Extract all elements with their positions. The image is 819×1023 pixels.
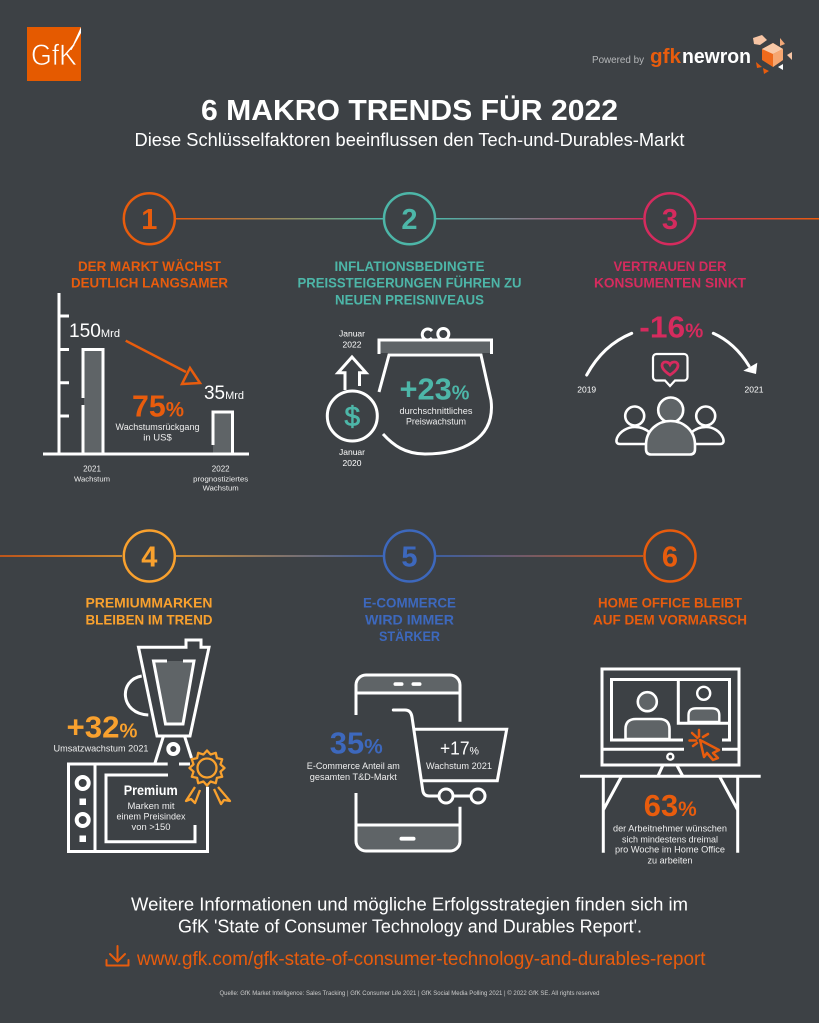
logo: GfK: GfK [31, 39, 77, 72]
number badge 3: 3 [662, 204, 678, 236]
bar chart [43, 293, 249, 454]
number badge 1 [124, 193, 175, 244]
stat +32%: +32% [66, 709, 138, 744]
number badge 2: 2 [401, 204, 418, 236]
icon: blender [125, 640, 209, 763]
stat 75%: 75% [132, 389, 184, 424]
closing text: GfK 'State of Consumer Technology and Durables Report'. [178, 916, 642, 936]
icon: cursor click [690, 730, 719, 760]
icon: desk [580, 765, 761, 853]
stat caption: Preiswachstum [406, 416, 466, 427]
label Januar 2022 [339, 329, 365, 350]
label Januar 2020: Januar [339, 447, 365, 457]
stat caption: Wachstumsrückgang [116, 422, 200, 433]
arrow: decline [126, 341, 200, 384]
heading 6: AUF DEM VORMARSCH [593, 611, 747, 627]
label Januar 2022: Januar [339, 329, 365, 339]
stat caption: Wachstum 2021 [426, 761, 492, 772]
heading 6: HOME OFFICE BLEIBT [598, 595, 742, 611]
stat -16%: -16% [639, 309, 704, 344]
number badge 4: 4 [141, 541, 157, 573]
heading 3: KONSUMENTEN SINKT [594, 275, 746, 291]
stat caption: durchschnittliches [400, 406, 473, 417]
icon: people [616, 398, 724, 454]
label Januar 2020 [339, 447, 365, 468]
label Januar 2020: 2020 [343, 458, 362, 468]
title: 6 MAKRO TRENDS FÜR 2022 [201, 94, 618, 127]
stat +23%: +23% [400, 371, 470, 406]
premium caption: von >150 [132, 822, 170, 833]
stat 63%: 63% [644, 788, 697, 823]
heading 5: STÄRKER [379, 628, 440, 644]
heading 2: NEUEN PREISNIVEAUS [335, 291, 484, 307]
heading 5: WIRD IMMER [365, 611, 454, 627]
subtitle: Diese Schlüsselfaktoren beeinflussen den Tech-und-Durables-Markt [134, 130, 684, 150]
heading 4 [86, 595, 212, 627]
stat 35%: 35% [330, 725, 383, 760]
stat caption [400, 406, 473, 427]
logo: powered by gfknewron: newron [682, 46, 751, 68]
heading 1 [71, 258, 228, 291]
premium caption [116, 801, 186, 833]
icon: speech bubble with heart [653, 354, 688, 386]
number badge 6: 6 [662, 541, 678, 573]
icon: purse [379, 328, 492, 454]
axis label 2022: Wachstum [203, 486, 239, 493]
logo: powered by gfknewron: gfk [650, 46, 682, 68]
label Januar 2022: 2022 [343, 340, 362, 350]
stat caption: der Arbeitnehmer wünschen [613, 824, 727, 835]
timeline connectors bottom row [0, 555, 643, 557]
number badge 6 [644, 530, 696, 582]
axis label 2022: 2022 [212, 465, 230, 474]
logo: GfK [27, 27, 81, 81]
icon: microwave [68, 764, 208, 852]
icon: download [106, 946, 128, 966]
heading 3: VERTRAUEN DER [614, 258, 726, 274]
icon: dollar coin with arrow: $ [345, 401, 361, 432]
heading 3 [594, 258, 746, 291]
number badge 2 [384, 193, 435, 244]
stat caption [613, 824, 727, 866]
value 150 Mrd: 150Mrd [69, 321, 120, 342]
stat caption: zu arbeiten [648, 855, 692, 866]
stat +17%: +17% [440, 738, 479, 758]
panel 3: consumer confidence [577, 193, 764, 454]
stat caption: E-Commerce Anteil am [307, 761, 400, 772]
value 35 Mrd: 35Mrd [204, 383, 244, 404]
closing text: Weitere Informationen und mögliche Erfolgsstrategien finden sich im [131, 895, 688, 915]
report link: www.gfk.com/gfk-state-of-consumer-technology-and-durables-report [136, 949, 706, 970]
icon: premium rosette [186, 750, 230, 804]
stat caption: Umsatzwachstum 2021 [54, 744, 148, 755]
heading 1: DEUTLICH LANGSAMER [71, 275, 228, 291]
axis label 2021 [74, 465, 110, 484]
axis label 2021: Wachstum [74, 477, 110, 484]
panel 5: e-commerce [307, 530, 507, 851]
stat caption [307, 761, 400, 783]
icon: smartphone [356, 675, 460, 851]
heading 5 [363, 595, 456, 644]
stat caption: pro Woche im Home Office [615, 845, 725, 856]
heading 4: PREMIUMMARKEN [86, 595, 212, 611]
arrow: arc decline [587, 333, 757, 375]
axis label 2022: prognostiziertes [193, 477, 249, 484]
icon: shopping cart [393, 710, 507, 803]
closing text [131, 895, 688, 936]
number badge 3 [644, 193, 696, 244]
number badge 5: 5 [401, 541, 418, 573]
stat caption: gesamten T&D-Markt [310, 772, 397, 783]
number badge 4 [124, 530, 175, 582]
panel 2: inflation [298, 193, 522, 468]
panel 6: home office [580, 530, 761, 866]
number badge 1: 1 [141, 204, 157, 236]
heading 6 [593, 595, 747, 627]
premium label: Premium [124, 782, 178, 798]
logo: powered by gfknewron [592, 35, 792, 74]
heading 2: INFLATIONSBEDINGTE [334, 258, 484, 274]
stat caption: sich mindestens dreimal [622, 834, 718, 845]
icon: monitor video call [602, 669, 739, 765]
label 2019: 2019 [577, 384, 596, 394]
heading 2 [298, 258, 522, 307]
premium caption: Marken mit [128, 801, 175, 812]
premium caption: einem Preisindex [116, 811, 186, 822]
number badge 5 [384, 530, 435, 582]
logo: powered by gfknewron: Powered by [592, 55, 644, 66]
source note: Quelle: GfK Market Intelligence: Sales Tracking | GfK Consumer Life 2021 | GfK Social Media Polling 2021 | © 2022 GfK SE. All rights reserved [220, 990, 600, 997]
panel 1: market [43, 193, 249, 493]
heading 5: E-COMMERCE [363, 595, 456, 611]
heading 4: BLEIBEN IM TREND [86, 611, 212, 627]
label 2021: 2021 [745, 384, 764, 394]
heading 1: DER MARKT WÄCHST [78, 258, 221, 274]
panel 4: premium brands [54, 530, 230, 852]
axis label 2022 [193, 465, 249, 493]
stat caption: in US$ [143, 433, 172, 444]
timeline connectors top row [176, 218, 819, 220]
icon: dollar coin with arrow [327, 357, 377, 441]
stat caption [116, 422, 200, 444]
heading 2: PREISSTEIGERUNGEN FÜHREN ZU [298, 275, 522, 291]
axis label 2021: 2021 [83, 465, 101, 474]
